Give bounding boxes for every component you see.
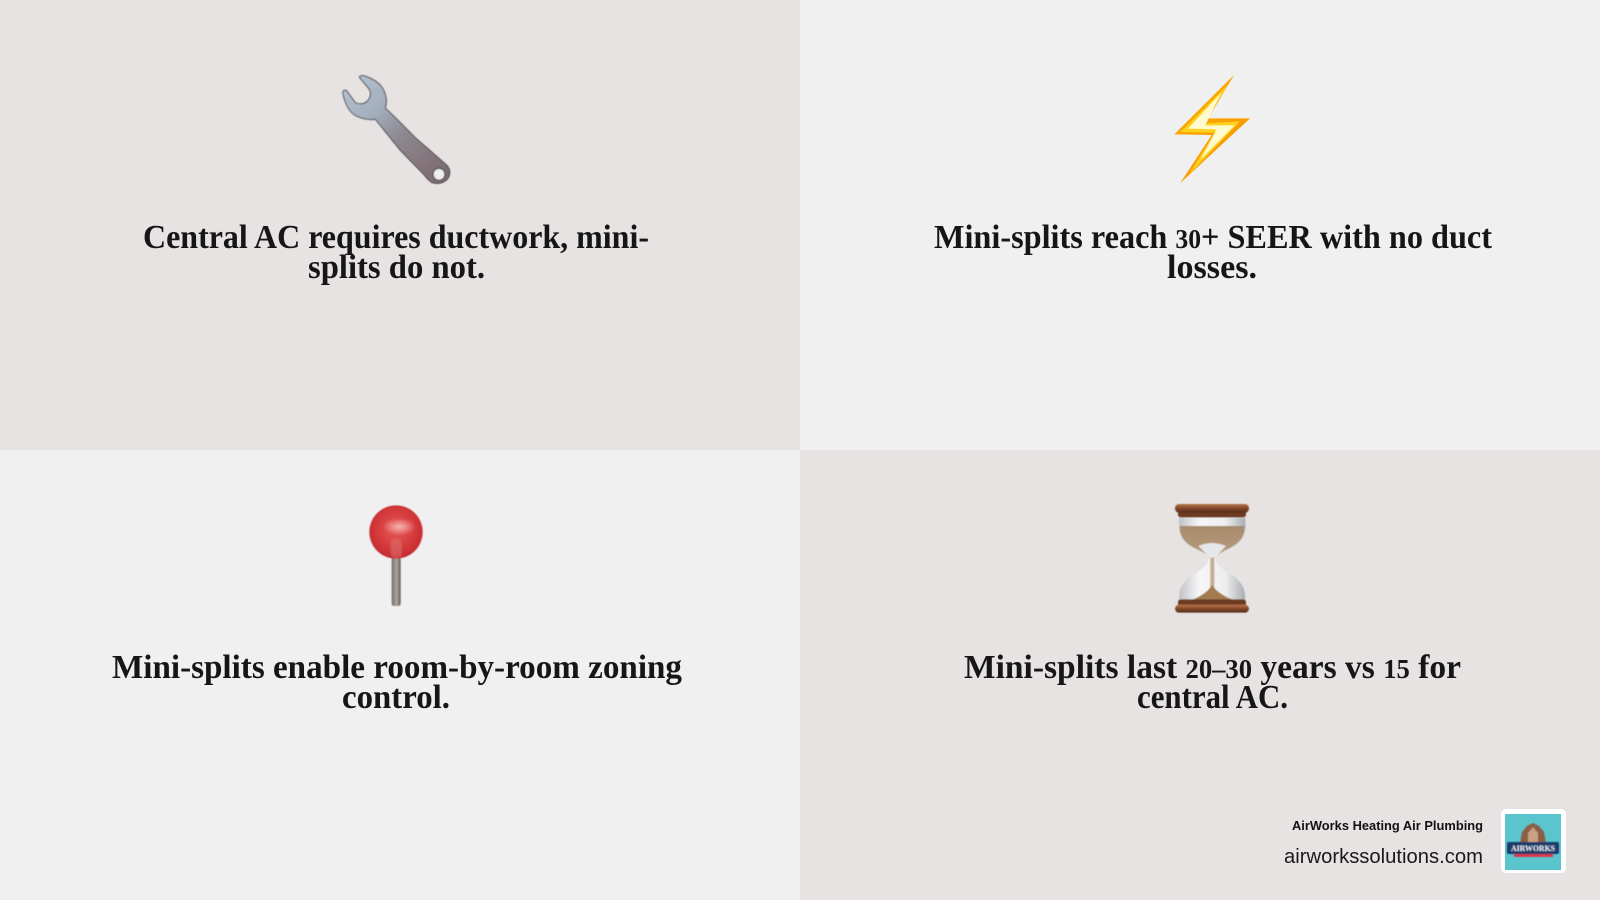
heading: efficiency: losses.	[1167, 249, 1257, 286]
heading: zoning: control.	[342, 679, 450, 716]
logo	[1501, 809, 1566, 873]
panel: efficiency	[800, 0, 1600, 450]
heading: zoning: Mini-splits enable room-by-room zoning	[112, 649, 682, 686]
heading: ductwork: splits do not.	[308, 249, 485, 286]
heading: zoning	[112, 649, 682, 716]
heading: efficiency	[934, 219, 1493, 286]
icon: lightning bolt	[1174, 75, 1250, 183]
icon: wrench	[343, 76, 450, 183]
heading: ductwork	[143, 219, 649, 286]
panel: lifespan	[800, 450, 1600, 900]
brand name: AirWorks Heating Air Plumbing	[1292, 818, 1483, 833]
icon: hourglass	[1175, 504, 1249, 613]
heading: ductwork: Central AC requires ductwork, mini-	[143, 219, 649, 256]
logo: AIRWORKS	[1511, 844, 1556, 853]
panel: zoning	[0, 450, 800, 900]
website url: airworkssolutions.com	[1284, 846, 1483, 868]
heading: lifespan: Mini-splits last 20–30 years vs 15 for	[964, 649, 1461, 686]
icon: round pushpin	[369, 505, 423, 606]
panel: ductwork	[0, 0, 800, 450]
heading: lifespan: central AC.	[1137, 679, 1288, 716]
heading: lifespan	[964, 649, 1461, 716]
heading: efficiency: Mini-splits reach 30+ SEER with no duct	[934, 219, 1493, 256]
